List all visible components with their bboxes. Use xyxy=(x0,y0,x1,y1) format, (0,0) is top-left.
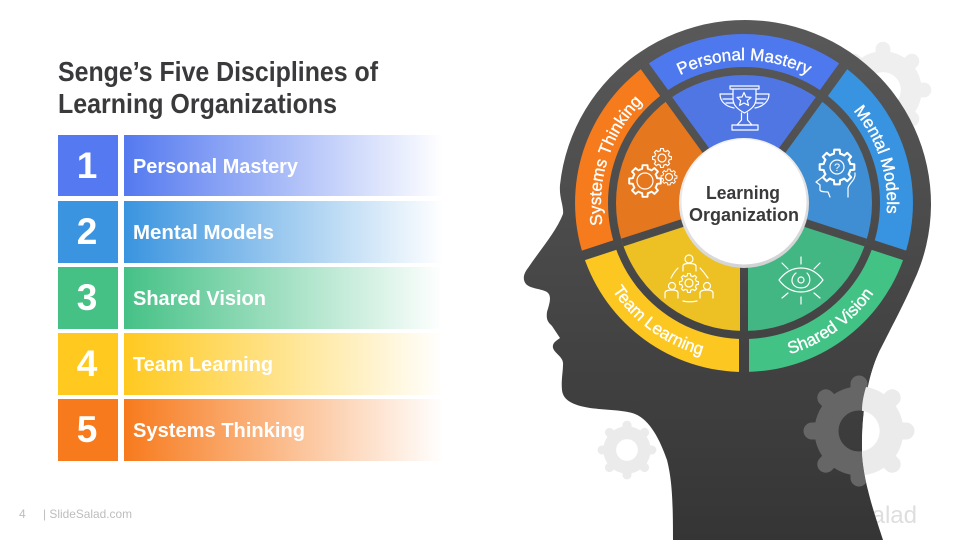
row 4: Team Learning xyxy=(58,333,443,395)
row 5: Systems Thinking: Systems Thinking xyxy=(133,420,305,442)
row 1: Personal Mastery: Personal Mastery xyxy=(133,156,299,178)
segment label: Shared Vision: Shared Vision xyxy=(788,290,874,354)
inner wedges xyxy=(616,75,872,331)
head silhouette xyxy=(524,20,931,540)
footer: | SlideSalad.com xyxy=(43,507,132,521)
watermark: Salad xyxy=(856,502,917,529)
row 2: Mental Models: Mental Models xyxy=(133,222,274,244)
gear part over the neck xyxy=(812,384,906,478)
row 2: Mental Models: 2 xyxy=(77,211,97,252)
discipline list xyxy=(58,135,443,461)
row 3: Shared Vision: Shared Vision xyxy=(133,288,266,310)
row 1: Personal Mastery xyxy=(58,135,443,196)
row 4: Team Learning: Team Learning xyxy=(133,354,273,376)
row 3: Shared Vision: 3 xyxy=(77,277,97,318)
center hub: Learning xyxy=(706,183,780,203)
segment label: Team Learning: Team Learning xyxy=(614,284,704,358)
title xyxy=(58,56,379,119)
gear part outside the neck xyxy=(862,387,906,475)
row 2: Mental Models xyxy=(58,201,443,263)
row 3: Shared Vision xyxy=(58,267,443,329)
segment label: Systems Thinking: Systems Thinking xyxy=(590,96,644,225)
row 4: Team Learning: 4 xyxy=(77,343,98,384)
icon: head with question gear xyxy=(816,150,855,197)
icon: gears xyxy=(629,149,677,197)
segment label: Personal Mastery: Personal Mastery xyxy=(676,48,812,76)
wheel xyxy=(575,34,913,372)
gear: top right background xyxy=(842,49,924,131)
icon: team xyxy=(665,255,713,302)
icon: trophy xyxy=(720,86,769,130)
title: Senge’s Five Disciplines of xyxy=(58,56,379,87)
center hub: Organization xyxy=(689,205,799,225)
gear: large lower right xyxy=(812,350,925,490)
row 1: Personal Mastery: 1 xyxy=(77,145,97,186)
footer: 4 xyxy=(19,507,26,521)
icon: eye xyxy=(779,257,823,304)
icon: head with question gear: ? xyxy=(834,162,840,174)
outer ring segments xyxy=(575,34,913,372)
row 5: Systems Thinking xyxy=(58,399,443,461)
gear: small lower left xyxy=(602,425,652,475)
center hub xyxy=(679,138,809,268)
dark ring xyxy=(608,67,880,339)
segment label: Mental Models: Mental Models xyxy=(854,104,900,214)
title: Learning Organizations xyxy=(58,88,337,119)
row 5: Systems Thinking: 5 xyxy=(77,409,97,450)
separators xyxy=(582,64,906,373)
